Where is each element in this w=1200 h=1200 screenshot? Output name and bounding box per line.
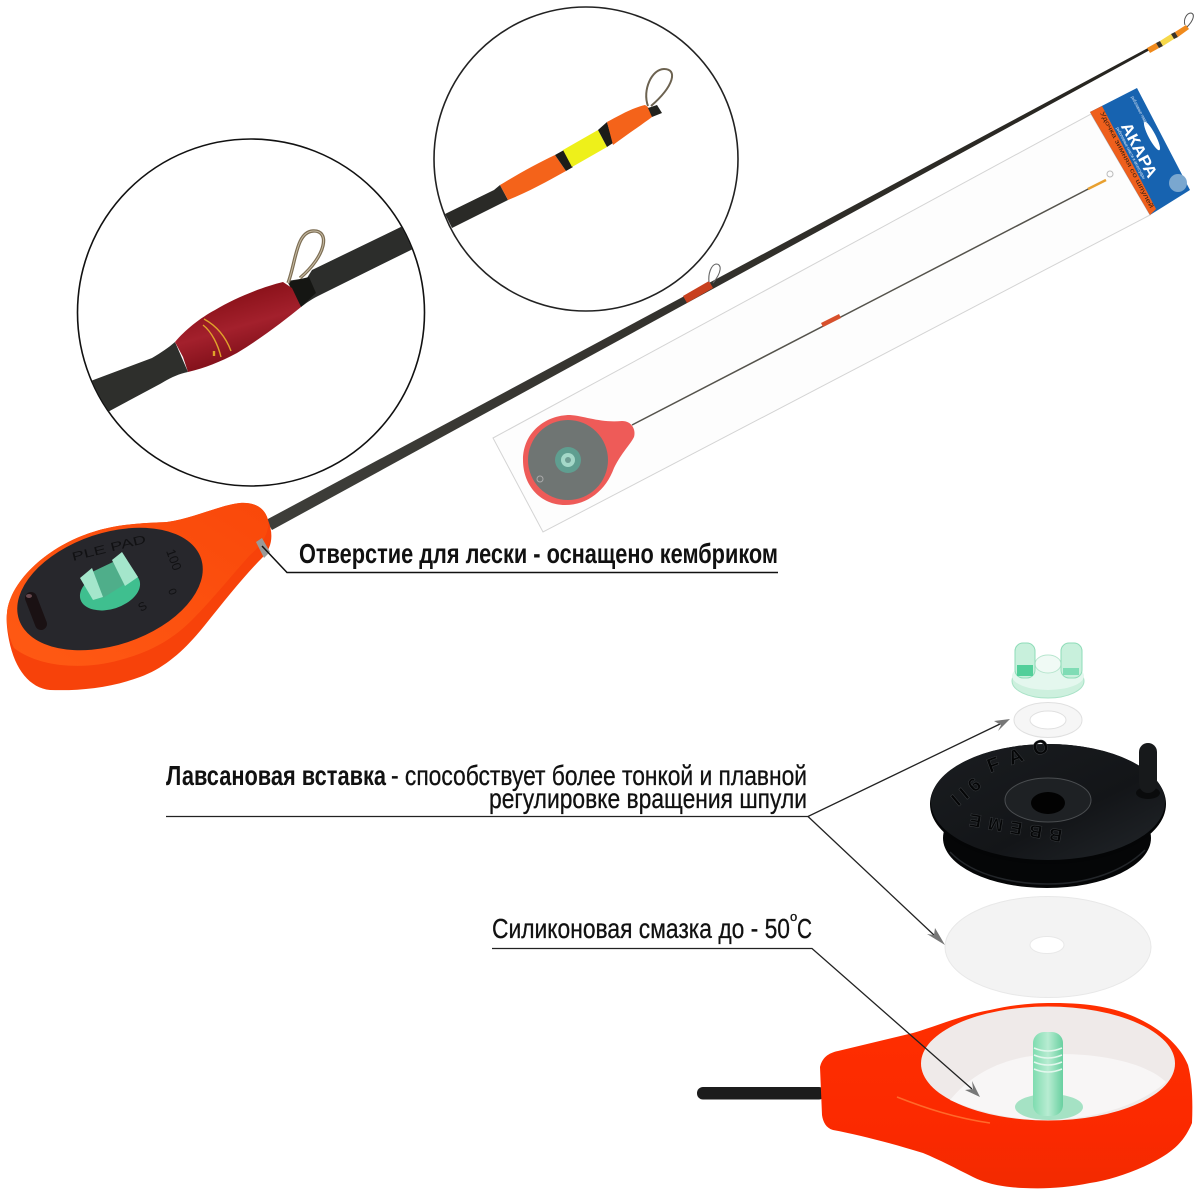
text rest of line one: - способствует более тонкой и плавной: [391, 760, 807, 791]
rod guide wrap: [683, 281, 713, 303]
disc mark: 0: [165, 587, 179, 597]
gold bands: [203, 319, 231, 357]
red wrap: [175, 282, 301, 372]
leader line: [492, 948, 972, 1089]
label: line hole: [262, 538, 778, 572]
degree symbol: о: [790, 909, 797, 924]
disc lettering: PLE PAD: [70, 532, 148, 564]
tip rod: [445, 185, 508, 228]
package card: [1090, 88, 1190, 215]
spool lettering number: II6: [948, 774, 986, 811]
seal: [1169, 174, 1187, 192]
spool lettering FAO: FAO: [984, 735, 1052, 778]
orange strip: [1090, 106, 1156, 215]
arrowhead: small washer: [994, 719, 1010, 731]
orange wrap upper: [607, 105, 652, 145]
disc number: 100: [163, 547, 185, 572]
handle top view: [1, 503, 271, 690]
line hole: [256, 538, 270, 558]
open handle: [697, 1003, 1192, 1188]
zoom circle: lower guide: [78, 139, 424, 486]
green post: [1015, 1032, 1083, 1120]
label: silicone grease: Силиконовая смазка до - 50: [492, 913, 790, 944]
body highlight: [897, 1097, 990, 1123]
spool disc: [1, 505, 219, 673]
exploded: green cap: [1012, 643, 1084, 698]
mini rod in package: [632, 171, 1113, 425]
exploded: large film disc: [945, 896, 1151, 998]
rod tip: [1147, 13, 1193, 53]
spool recess: [1005, 778, 1091, 822]
disc mark s: S: [136, 598, 149, 615]
spool hole: [1031, 792, 1065, 814]
cavity floor: [950, 1054, 1166, 1120]
orange wrap lower: [500, 155, 566, 200]
black band upper: [598, 122, 613, 147]
leader lines: [166, 724, 1000, 936]
transparent package panel: [493, 114, 1150, 532]
wire loop: [288, 231, 324, 283]
small card text: рыболовные товары: [1130, 95, 1149, 126]
label: lavsan insert: Лавсановая вставка: [166, 760, 386, 791]
label: lavsan insert: [166, 719, 1010, 945]
strip text: Удочка зимняя со шпулей: [1098, 110, 1156, 210]
handle rod stub: [697, 1087, 825, 1100]
rod segments: [88, 223, 421, 414]
label: silicone grease: [492, 909, 980, 1097]
exploded: small washer: [1014, 702, 1082, 738]
brand subtitle: рыболовные снасти и аксессуары: [1115, 126, 1147, 180]
main rod: [266, 13, 1193, 530]
brand name: АКАРА: [1117, 120, 1160, 181]
rod end: [648, 105, 662, 117]
label: line hole: Отверстие для лески - оснащено кембриком: [299, 538, 778, 569]
fish logo: [1141, 120, 1163, 152]
black band lower: [555, 150, 573, 171]
handle upper face: [7, 503, 268, 666]
arrowhead: film disc: [927, 928, 945, 945]
spool lettering bottom: BBEME: [968, 810, 1064, 846]
reel cavity: [921, 1006, 1175, 1120]
yellow wrap: [563, 130, 607, 167]
exploded: black spool: [930, 735, 1166, 888]
celsius: С: [797, 913, 812, 944]
reel pin: [26, 594, 41, 624]
text line two: регулировке вращения шпули: [489, 783, 807, 814]
spool pin: [1136, 743, 1160, 799]
leader line: [262, 546, 778, 572]
green hub: [75, 552, 145, 618]
open handle body: [820, 1003, 1192, 1188]
arrowhead: [965, 1081, 980, 1097]
zoom circle: tip: [434, 7, 738, 311]
mini handle in package: [523, 415, 634, 505]
rod guide loop: [709, 264, 720, 283]
tip loop: [646, 69, 672, 106]
